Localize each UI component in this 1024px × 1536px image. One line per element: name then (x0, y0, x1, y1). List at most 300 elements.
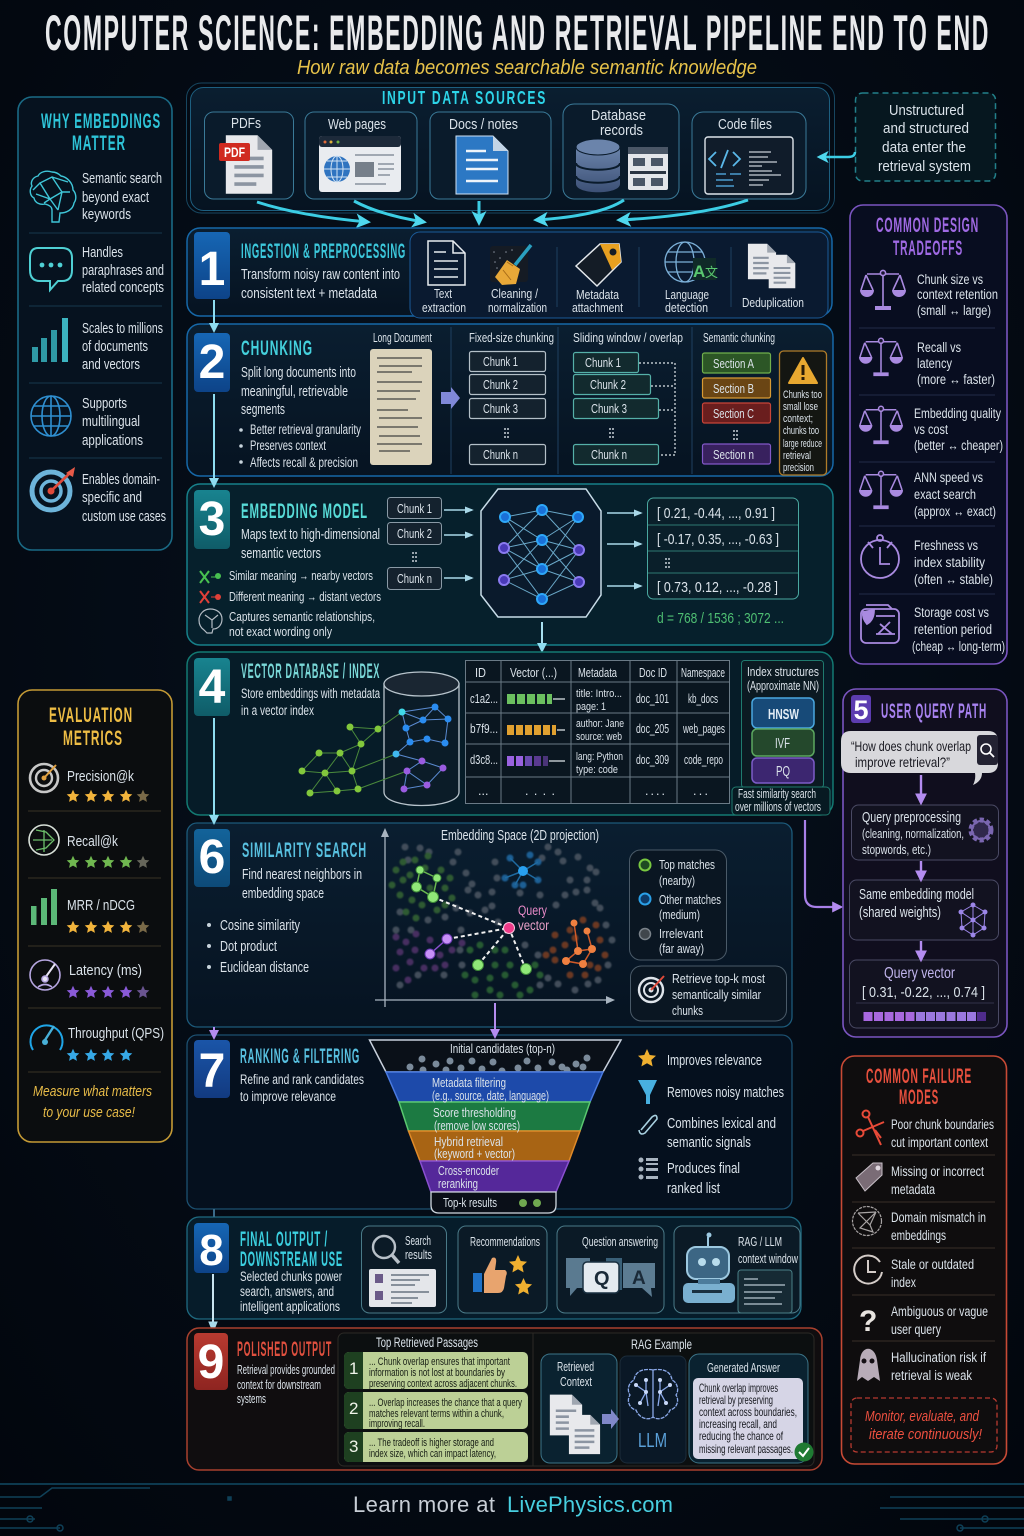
badge: 6: 6 (199, 831, 225, 884)
card: code files (692, 112, 806, 199)
text: vector db description (241, 686, 380, 718)
text: language detection: detection (665, 301, 708, 315)
icon: language globe: A (693, 262, 705, 281)
text: cleaning (488, 287, 547, 315)
chunks input: Chunk n (397, 572, 432, 586)
callout: user question: improve retrieval?” (855, 754, 950, 770)
text: text extraction (422, 287, 466, 315)
badge: 9: 9 (198, 1336, 224, 1389)
heading: similarity search: SIMILARITY SEARCH (242, 839, 367, 862)
column: sliding window: Chunk 1 (585, 356, 621, 370)
column: fixed-size chunking: Chunk 3 (483, 402, 518, 416)
text: vector db description: Store embeddings with metadata (241, 686, 380, 701)
text: handles paraphrases: paraphrases and (82, 262, 164, 279)
icon: star (638, 1049, 656, 1066)
chart: ranking funnel: (remove low scores) (434, 1119, 520, 1133)
panel: index structures: IVF (775, 735, 790, 752)
card: search results: results (405, 1248, 432, 1262)
legend: match types: (medium) (659, 908, 700, 922)
panel: top retrieved passages: ... The tradeoff is higher storage and (369, 1437, 494, 1449)
chart: ranking funnel: (keyword + vector) (434, 1147, 515, 1161)
legend: different meaning (200, 590, 381, 604)
text: stale index: Stale or outdated (891, 1257, 974, 1272)
text: storage cost (912, 605, 1005, 654)
vectors output: [ 0.21, -0.44, ..., 0.91 ] (657, 505, 775, 522)
panel: step 6 similarity search (187, 823, 792, 1027)
text: enables: custom use cases (82, 508, 166, 525)
text: improves relevance: Improves relevance (667, 1052, 762, 1069)
text: chunk size: context retention (917, 287, 998, 302)
column: sliding window: Chunk 2 (590, 378, 626, 392)
panel: user query path (841, 689, 1007, 1037)
heading: common design tradeoffs (876, 214, 979, 260)
arrows: left pipeline flow (213, 300, 495, 1331)
list: similarity measures: Dot product (220, 938, 278, 955)
heading: evaluation metrics: EVALUATION (49, 704, 133, 727)
badge: 7: 7 (199, 1045, 225, 1098)
text: freshness: (often ↔ stable) (914, 572, 993, 587)
chart: ranking funnel: Score thresholding (433, 1106, 516, 1120)
icon: latency gauge (30, 960, 60, 990)
text: similarity description (242, 866, 362, 902)
panel: top retrieved passages: 3 (349, 1437, 358, 1456)
icon: stale clock (854, 1256, 882, 1284)
stars: precision (67, 790, 149, 802)
text: ann speed: (approx ↔ exact) (914, 504, 996, 519)
chart: ranking funnel: reranking (438, 1177, 478, 1191)
chart: embedding space scatter: Query (518, 903, 547, 918)
text: ranking description: Refine and rank candidates (240, 1072, 364, 1087)
text: polished description: Retrieval provides grounded (237, 1363, 335, 1377)
arrows: chunks to model (444, 510, 472, 578)
text: language detection (665, 288, 709, 315)
table: vector records: author: Jane (576, 718, 624, 730)
icon: scale quality (859, 406, 903, 444)
text: supports: Supports (82, 395, 127, 412)
icon: speech bubble (30, 248, 72, 290)
text: polished description: context for downstream (237, 1378, 321, 1392)
heading: common failure modes (866, 1065, 972, 1109)
arrows: sources into ingestion (257, 200, 748, 223)
badge: 2: 2 (199, 336, 225, 389)
legend: match types: Top matches (659, 858, 715, 872)
badge: 4: 4 (199, 661, 226, 714)
column: fixed-size chunking: Chunk n (483, 448, 518, 462)
text: semantic search (82, 170, 162, 223)
text: text extraction: extraction (422, 301, 466, 315)
panel: step 9 polished output: POLISHED OUTPUT (237, 1338, 332, 1361)
arrows: query flow (920, 775, 922, 960)
text: embedding quality (914, 406, 1003, 453)
legend: similar meaning (200, 569, 373, 583)
stars: latency (67, 986, 149, 998)
card: question answering: A (632, 1268, 646, 1289)
panel: tradeoffs (850, 205, 1007, 664)
panel: index structures: Index structures (747, 665, 819, 679)
text: missing metadata (891, 1164, 984, 1197)
panel: top retrieved passages: ... Chunk overlap ensures that important (369, 1356, 510, 1368)
icon: long document: Long Document (373, 331, 432, 345)
table: vector records: doc_205 (636, 722, 669, 736)
badge: 1: 1 (199, 243, 225, 296)
icon: paperclip (639, 1115, 657, 1134)
icon: vector cylinder with network (298, 672, 459, 806)
panel: step 2 chunking (187, 324, 833, 476)
icon: deduplication (748, 244, 795, 288)
text: dimensions: d = 768 / 1536 ; 3072 ... (657, 610, 784, 627)
panel: why embeddings matter (18, 97, 172, 550)
card: generated answer: context across boundaries, (699, 1405, 797, 1419)
text: produces final: ranked list (667, 1180, 721, 1197)
text: chunking description: meaningful, retrievable (241, 383, 348, 400)
card: search results (362, 1226, 446, 1313)
card: question answering: Q (594, 1268, 610, 1290)
text: precision at k: Precision@k (67, 768, 134, 785)
text: final description: search, answers, and (240, 1284, 334, 1299)
arrow: doc to chunks (441, 387, 460, 409)
arrow: callout to sources (819, 152, 855, 157)
callout: measure what matters: to your use case! (43, 1104, 136, 1121)
chart: embedding space scatter (375, 827, 615, 1007)
text: chunk size: Chunk size vs (917, 272, 983, 287)
list: similarity measures (207, 917, 309, 976)
text: ann speed (914, 470, 996, 519)
column: sliding window: Sliding window / overlap (573, 331, 683, 345)
icon: scale chunk size (860, 270, 906, 310)
chunks input: Chunk 1 (397, 502, 432, 516)
icon: scissors (856, 1110, 884, 1145)
text: embedding quality: Embedding quality (914, 406, 1001, 421)
icon: precision target (30, 764, 58, 792)
icon: green bars (31, 889, 57, 925)
panel: step 4 vector database: VECTOR DATABASE / INDEX (241, 660, 380, 683)
panel: top retrieved passages: matches relevant terms within a chunk, (369, 1408, 504, 1420)
stars: mrr (67, 921, 149, 933)
panel: top retrieved passages (344, 1335, 528, 1462)
text: ingestion description (241, 266, 400, 302)
icon: neural network (481, 489, 601, 617)
badge: 8 (194, 1223, 229, 1275)
badge: 8: 8 (199, 1226, 224, 1275)
table: vector records: lang: Python (576, 751, 623, 763)
text: hallucination risk (891, 1350, 986, 1383)
subtitle: How raw data becomes searchable semantic knowledge (297, 57, 757, 79)
card: search results: Search (405, 1234, 431, 1248)
box: query preprocessing: Query preprocessing (862, 809, 961, 826)
column: semantic chunking (702, 331, 775, 464)
panel: top retrieved passages: preserving context across adjacent chunks. (369, 1378, 517, 1390)
panel: step 1 ingestion: INGESTION & PREPROCESSING (241, 240, 406, 263)
chart: ranking funnel (370, 1040, 621, 1213)
icon: long document (370, 331, 432, 465)
badge: 4 (194, 658, 230, 716)
card: retrieved context: Context (560, 1375, 592, 1389)
icon: question mark: ? (859, 1305, 877, 1338)
panel: top retrieved passages: ... Overlap increases the chance that a query (369, 1397, 522, 1409)
badge: 2 (194, 333, 230, 392)
card: generated answer: retrieval by preserving (699, 1393, 773, 1407)
callout: unstructured and structured data (856, 93, 996, 181)
callout: monitor evaluate iterate: Monitor, evaluate, and (865, 1408, 979, 1425)
card: question answering: Question answering (582, 1235, 658, 1249)
badge: 3 (194, 490, 230, 549)
text: domain mismatch: Domain mismatch in (891, 1210, 986, 1225)
list: similarity measures: Euclidean distance (220, 959, 309, 976)
badge: 3: 3 (199, 493, 225, 546)
card: recommendations: Recommendations (470, 1235, 540, 1249)
panel: step 4 vector database (187, 652, 833, 815)
panel: index structures: PQ (776, 763, 790, 780)
panel: step 7 ranking and filtering (187, 1035, 792, 1213)
text: recall latency: Recall vs (917, 340, 961, 355)
chart: embedding space scatter: Embedding Space (2D projection) (441, 827, 599, 844)
text: throughput: Throughput (QPS) (68, 1025, 164, 1042)
panel: rag example (541, 1337, 814, 1463)
table: vector records: web_pages (682, 722, 725, 736)
callout: measure what matters: Measure what matters (33, 1083, 152, 1100)
text: ingestion description: Transform noisy raw content into (241, 266, 400, 283)
stars: recall (67, 856, 149, 868)
card: retrieved context (541, 1354, 617, 1463)
card: code files: Code files (718, 116, 772, 133)
icon: filter funnel (638, 1080, 657, 1104)
text: cleaning: Cleaning / (491, 287, 538, 301)
text: domain mismatch (891, 1210, 986, 1243)
column: semantic chunking: Section A (713, 357, 755, 371)
text: final description (240, 1269, 342, 1314)
text: stale index (891, 1257, 974, 1290)
panel: step 8 final output (187, 1217, 801, 1319)
legend: match types: Other matches (659, 893, 721, 907)
column: fixed-size chunking: Chunk 2 (483, 378, 518, 392)
text: handles paraphrases: related concepts (82, 279, 164, 296)
icon: metadata tag (576, 244, 621, 286)
card: retrieved context: Retrieved (557, 1360, 594, 1374)
card: recommendations (458, 1226, 547, 1313)
callout: chunk size warning: large reduce (783, 438, 822, 450)
list: chunking bullets (239, 422, 361, 470)
text: hallucination risk: Hallucination risk if (891, 1350, 986, 1365)
text: ann speed: ANN speed vs (914, 470, 983, 485)
text: freshness (914, 538, 993, 587)
text: stale index: index (891, 1275, 916, 1290)
card: docs notes: Docs / notes (449, 116, 518, 133)
legend: match types: Irrelevant (659, 927, 703, 941)
text: combines lexical: Combines lexical and (667, 1115, 776, 1132)
text: metadata attachment (572, 288, 623, 315)
column: semantic chunking: Semantic chunking (703, 331, 775, 345)
text: semantic search: keywords (82, 206, 131, 223)
box: same embedding model (850, 880, 998, 940)
table: vector records: source: web (576, 731, 622, 743)
box: query preprocessing (852, 805, 998, 860)
callout: chunk size warning: context; (783, 413, 813, 425)
table: vector records: d3c8... (470, 753, 498, 767)
badge: 5: 5 (853, 695, 869, 725)
text: deduplication: Deduplication (742, 296, 804, 310)
text: chunk size: (small ↔ large) (917, 303, 991, 318)
text: scales: Scales to millions (82, 320, 163, 337)
callout: chunk size warning: chunks too (783, 425, 819, 437)
text: embedding quality: (better ↔ cheaper) (914, 438, 1003, 453)
box: same embedding model: Same embedding model (859, 886, 974, 903)
chart: ranking funnel: Top-k results (443, 1196, 497, 1210)
icon: storage (861, 605, 899, 643)
column: sliding window: Chunk n (591, 448, 627, 462)
table: vector records: c1a2... (470, 692, 498, 706)
chart: ranking funnel: Hybrid retrieval (434, 1135, 503, 1149)
text: scales: and vectors (82, 356, 140, 373)
footer circuit decoration (0, 1484, 1024, 1531)
text: scales: of documents (82, 338, 148, 355)
text: scales (82, 320, 163, 373)
card: generated answer: increasing recall, and (699, 1417, 777, 1431)
text: metadata attachment: Metadata (576, 288, 619, 302)
vectors output (648, 498, 798, 599)
heading: common failure modes: MODES (899, 1086, 939, 1109)
table: vector records: kb_docs (688, 692, 718, 706)
text: poor chunk boundaries (891, 1117, 994, 1150)
card: generated answer: Chunk overlap improves (699, 1381, 778, 1395)
chart: ranking funnel: Metadata filtering (432, 1076, 506, 1090)
text: chunking description: segments (241, 401, 285, 418)
legend: match types: (nearby) (659, 874, 695, 888)
icon: bar chart (32, 318, 68, 362)
footer: learn more: Learn more at (353, 1492, 495, 1517)
icon: tag (856, 1163, 882, 1191)
heading: why embeddings matter (41, 110, 161, 155)
callout: retrieve top-k: semantically similar (672, 988, 761, 1002)
card: rag llm context: context window (738, 1252, 799, 1266)
text: removes noisy matches: Removes noisy matches (667, 1084, 784, 1101)
text: ann speed: exact search (914, 487, 976, 502)
icon: globe (31, 396, 71, 436)
card: rag llm context (674, 1226, 800, 1313)
text: similarity description: embedding space (242, 885, 324, 902)
card: rag llm context: RAG / LLM (738, 1235, 782, 1249)
chunks input (388, 498, 442, 590)
table: vector records: ID (475, 666, 486, 680)
arrow: step 4 to user query path (805, 820, 841, 907)
icon: text extraction (428, 241, 465, 285)
text: poor chunk boundaries: cut important context (891, 1135, 988, 1150)
text: language detection: Language (665, 288, 709, 302)
text: ambiguous query: user query (891, 1322, 941, 1337)
callout: retrieve top-k: chunks (672, 1004, 703, 1018)
text: hallucination risk: retrieval is weak (891, 1368, 972, 1383)
text: enables: specific and (82, 489, 142, 506)
panel: top retrieved passages: index size, which can impact latency, (369, 1448, 496, 1460)
text: latency: Latency (ms) (69, 962, 142, 979)
caption: fast similarity search: over millions of vectors (735, 800, 821, 814)
stars: throughput (67, 1049, 132, 1061)
table: vector records: Metadata (578, 666, 617, 680)
panel: top retrieved passages: 1 (349, 1359, 358, 1378)
list: chunking bullets: Preserves context (250, 438, 326, 453)
card: generated answer (689, 1354, 814, 1463)
panel: step 1 ingestion (187, 228, 832, 318)
icon: target (32, 467, 75, 510)
icon: language globe (665, 242, 718, 282)
callout: measure what matters (33, 1083, 152, 1121)
text: storage cost: retention period (914, 622, 992, 637)
text: recall latency: (more ↔ faster) (917, 372, 995, 387)
badge: 7 (194, 1040, 230, 1098)
list: similarity measures: Cosine similarity (220, 917, 300, 934)
legend: match types (630, 850, 726, 960)
panel: index structures (742, 660, 824, 788)
vectors output: [ 0.73, 0.12, ..., -0.28 ] (657, 579, 778, 596)
text: chunking description (241, 364, 356, 418)
text: produces final: Produces final (667, 1160, 740, 1177)
text: embedding description (241, 526, 380, 562)
text: missing metadata: metadata (891, 1182, 935, 1197)
text: embedding description: semantic vectors (241, 545, 321, 562)
table: vector records: Vector (...) (510, 666, 557, 680)
text: ranking description: to improve relevance (240, 1089, 336, 1104)
icon: ghost (857, 1349, 880, 1381)
card: llm brain (620, 1356, 686, 1463)
heading: evaluation metrics (49, 704, 133, 750)
heading: evaluation metrics: METRICS (63, 727, 123, 750)
text: produces final (667, 1160, 740, 1197)
column: fixed-size chunking: Fixed-size chunking (469, 331, 554, 345)
caption: fast similarity search: Fast similarity search (738, 787, 816, 801)
panel: step 7 ranking and filtering: RANKING & FILTERING (240, 1045, 360, 1068)
panel: top retrieved passages: Top Retrieved Passages (376, 1335, 478, 1350)
panel: index structures: HNSW (768, 706, 800, 723)
text: semantic search: beyond exact (82, 189, 150, 206)
list: chunking bullets: Better retrieval granularity (250, 422, 361, 437)
chart: ranking funnel: Initial candidates (top-n) (450, 1042, 555, 1056)
icon: broom (490, 245, 531, 285)
text: supports: applications (82, 432, 143, 449)
panel: ingestion steps (410, 232, 828, 318)
text: missing metadata: Missing or incorrect (891, 1164, 984, 1179)
card: generated answer: missing relevant passages. (699, 1442, 793, 1456)
text: final description: intelligent applications (240, 1299, 340, 1314)
chart: ranking funnel: Cross-encoder (438, 1164, 499, 1178)
arrow: context to llm (602, 1409, 619, 1429)
legend: similar meaning: Similar meaning → nearby vectors (229, 569, 373, 583)
text: semantic search: Semantic search (82, 170, 162, 187)
table: vector records: page: 1 (576, 701, 606, 713)
heading: why embeddings matter: WHY EMBEDDINGS (41, 110, 161, 133)
column: semantic chunking: Section n (713, 448, 754, 462)
card: docs notes (430, 112, 551, 199)
text: ambiguous query (891, 1304, 988, 1337)
icon: throughput gauge (31, 1025, 63, 1050)
column: fixed-size chunking (469, 331, 554, 464)
panel: input data sources (186, 83, 834, 213)
table: vector records: code_repo (684, 753, 723, 767)
text: freshness: Freshness vs (914, 538, 978, 553)
table: vector records: type: code (576, 764, 618, 776)
card: llm brain: LLM (638, 1430, 667, 1452)
table: vector records: . . . . (525, 784, 555, 798)
arrows: model to vectors (607, 513, 641, 586)
callout: user question: “How does chunk overlap (851, 738, 971, 754)
text: vector db description: in a vector index (241, 703, 314, 718)
text: captures semantic relationships: Captures semantic relationships, (229, 610, 375, 624)
panel: rag example: RAG Example (631, 1337, 692, 1352)
callout: chunk size warning: precision (783, 462, 814, 474)
callout: user question (841, 731, 998, 785)
footer: learn more: LivePhysics.com (507, 1492, 673, 1517)
box: same embedding model: (shared weights) (859, 904, 941, 921)
text: freshness: index stability (914, 555, 985, 570)
text: similarity description: Find nearest neighbors in (242, 866, 362, 883)
